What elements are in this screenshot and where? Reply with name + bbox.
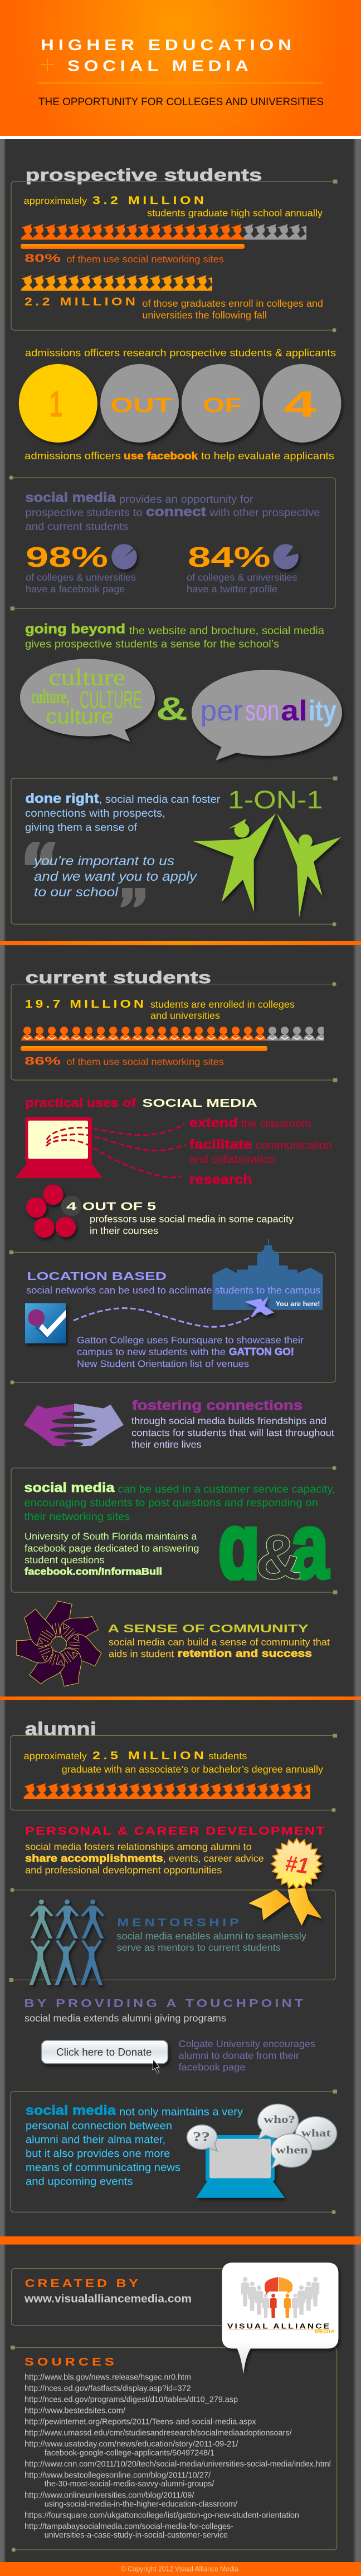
heading: practical uses — [26, 1096, 257, 1110]
text: going beyond: the website and brochure, social media — [129, 625, 324, 637]
text: personal and career development: , events, career advice — [163, 1853, 264, 1864]
bubble: what: what — [301, 2128, 331, 2139]
website: www.visualalliancemedia.com — [24, 2293, 192, 2305]
stat: 19.7 million: students are enrolled in colleges — [150, 999, 295, 1010]
icon: cursor — [153, 2059, 159, 2073]
chart: one out of four circles: OUT — [110, 394, 172, 416]
speech bubble: personality: per — [201, 695, 243, 727]
intro text: can be used in a customer service capacity, — [118, 1483, 335, 1495]
text: colgate university: alumni to donate from their — [179, 2050, 299, 2061]
heading: current students: current students — [26, 968, 211, 987]
speech bubble: culture: culture — [49, 665, 125, 691]
quote text: and we want you to apply — [34, 869, 197, 884]
heading: created by: CREATED BY — [25, 2277, 138, 2289]
intro text — [25, 791, 221, 833]
panel: done right — [11, 777, 341, 926]
heading: practical uses: SOCIAL MEDIA — [142, 1097, 257, 1110]
text: colgate university: facebook page — [179, 2062, 246, 2073]
bar: 80 percent — [21, 244, 245, 249]
intro text: , social media can foster — [99, 793, 221, 806]
icon: foursquare — [25, 1303, 66, 1343]
panel: alumni stats — [11, 1734, 337, 1812]
text: providing a touchpoint: BY PROVIDING A TOUCHPOINT — [24, 1997, 303, 2009]
body text: but it also provides one more — [26, 2147, 170, 2160]
text: admissions officers use facebook: to help evaluate applicants — [201, 450, 334, 462]
intro text: done right — [26, 791, 99, 806]
source list: universities-a-case-study-in-social-customer-service — [45, 2531, 228, 2540]
text: providing a touchpoint — [24, 1997, 303, 2024]
icon: two figures high five — [193, 813, 341, 917]
text: acclimate: social networks can be used to acclimate students to the campus — [26, 1285, 321, 1296]
logo: visual alliance media speech bubble — [222, 2263, 339, 2374]
text: university of south florida: facebook.com/InformaBull — [25, 1566, 162, 1577]
icon: community hands flower — [13, 1601, 104, 1690]
icon: closing quote — [120, 888, 145, 907]
text: going beyond: going beyond — [25, 622, 125, 637]
label: you are here: You are here! — [276, 1300, 320, 1308]
intro text: connections with prospects, — [25, 807, 165, 820]
text: admissions officers use facebook: admissions officers — [25, 450, 121, 462]
stat: 2.2 million: universities the following fall — [142, 310, 267, 321]
icon: campus building — [213, 1239, 323, 1310]
stat: 84 percent twitter: of colleges & universities — [187, 572, 297, 583]
heading: location based: LOCATION BASED — [27, 1270, 167, 1283]
logo wordmark: VISUAL ALLIANCE — [227, 2323, 329, 2330]
text: personal and career development: and professional development opportunities — [25, 1864, 222, 1876]
logo media label: MEDIA — [315, 2329, 335, 2334]
icon: opening quote — [25, 842, 56, 865]
stat: 4 out of 5: in their courses — [90, 1225, 158, 1237]
stat: 2.2 million — [25, 296, 323, 321]
source list: http://nces.ed.gov/programs/digest/d10/tables/dt10_279.asp — [25, 2396, 238, 2405]
panel: social media opportunity — [9, 475, 335, 610]
graphic: q and a: a — [291, 1495, 329, 1598]
quote text: you’re important to us — [33, 853, 174, 868]
bubble: when: when — [276, 2145, 309, 2156]
stat: 84 percent twitter — [187, 541, 299, 595]
text: going beyond: gives prospective students a sense for the school’s — [25, 638, 279, 650]
intro text: connect — [146, 504, 206, 519]
stat: 98 percent facebook: have a facebook page — [26, 583, 125, 595]
source list: facebook-google-college-applicants/50497248/1 — [45, 2449, 214, 2457]
stat: 80 percent: 80% — [25, 253, 61, 265]
text: admissions officers research: admissions officers research prospective students & applicants — [25, 347, 336, 359]
icon: map marker x — [245, 1297, 274, 1317]
speech bubble: culture: CULTURE — [80, 686, 142, 714]
text: fostering connections: fostering connections — [132, 1398, 303, 1414]
text: gatton college: campus to new students with the — [77, 1346, 226, 1357]
list: practical uses: the classroom — [241, 1118, 311, 1130]
button: click here to donate — [41, 2040, 168, 2064]
intro text: encouraging students to post questions and responding on — [24, 1497, 318, 1509]
stat: 2.2 million: of those graduates enroll in colleges and — [142, 298, 323, 309]
header rule — [38, 82, 323, 84]
list: practical uses: research — [189, 1172, 252, 1188]
stat: 4 out of 5: 4 — [66, 1200, 77, 1213]
icon: blue laptop — [196, 2135, 285, 2198]
stat: 84 percent twitter: have a twitter profile — [187, 583, 277, 595]
chart: four of five circles — [26, 1185, 81, 1238]
intro text: social media — [26, 490, 116, 506]
stat: 3.2 million: 3.2 MILLION — [92, 194, 204, 207]
text: mentors — [117, 1931, 306, 1953]
source list: the-30-most-social-media-savvy-alumni-groups/ — [45, 2480, 214, 2489]
text: gatton college: Gatton College uses Foursquare to showcase their — [77, 1334, 304, 1346]
stat: 19.7 million — [25, 998, 295, 1021]
graphic: q and a — [219, 1525, 331, 1581]
text: fostering connections: contacts for students that will last throughout — [131, 1427, 334, 1438]
source list: http://pewinternet.org/Reports/2011/Teens-and-social-media.aspx — [25, 2418, 256, 2427]
body text: and upcoming events — [26, 2175, 133, 2187]
copyright: © Copyright 2012 Visual Alliance Media — [121, 2565, 239, 2573]
text: personal and career development: PERSONAL & CAREER DEVELOPMENT — [25, 1825, 325, 1837]
text: university of south florida: student questions — [25, 1554, 105, 1566]
body text — [26, 2103, 243, 2187]
panel: enrolment stats — [11, 982, 338, 1082]
body text: not only maintains a very — [119, 2106, 243, 2118]
stat: 2.5 million: 2.5 MILLION — [92, 1749, 204, 1762]
list: practical uses: and collaboration — [189, 1154, 275, 1166]
heading: mentorship: MENTORSHIP — [117, 1916, 239, 1929]
bubble: who — [258, 2104, 298, 2140]
stat: 4 out of 5 — [66, 1200, 294, 1237]
stat: 4 out of 5: professors use social media in some capacity — [90, 1214, 294, 1225]
pictogram: enrolling graduates row — [21, 275, 212, 291]
intro text: prospective students to — [26, 507, 143, 519]
heading: prospective students: prospective students — [26, 165, 262, 185]
intro text: social media — [24, 1480, 115, 1495]
text: gatton college — [77, 1334, 304, 1369]
panel: mentorship — [9, 1888, 335, 1985]
stat: 86 percent — [25, 1055, 224, 1067]
text: personal and career development — [25, 1825, 325, 1876]
text: university of south florida — [25, 1531, 199, 1577]
stat: 98 percent facebook: of colleges & universities — [26, 572, 136, 583]
stat: 3.2 million: students graduate high school annually — [147, 207, 323, 218]
text: going beyond — [25, 622, 324, 650]
text: gatton college: New Student Orientation list of venues — [77, 1358, 249, 1369]
intro text — [26, 490, 320, 533]
source list: http://www.usatoday.com/news/education/story/2011-09-21/ — [25, 2440, 238, 2449]
text: personal and career development: share accomplishments — [25, 1853, 163, 1864]
source list: using-social-media-in-the-higher-education-classroom/ — [45, 2500, 238, 2509]
body text: alumni and their alma mater, — [26, 2133, 165, 2146]
icon: red and orange chat bubbles — [265, 2277, 292, 2295]
heading: practical uses: practical uses of — [26, 1096, 136, 1110]
pictogram: graduates row — [21, 224, 306, 240]
source list: http://www.bls.gov/news.release/hsgec.nr0.htm — [25, 2373, 191, 2382]
text: sense of community: aids in student — [109, 1648, 174, 1659]
source list: http://tampabaysocialmedia.com/social-media-for-colleges- — [25, 2522, 233, 2531]
plus sign — [41, 58, 54, 71]
title line two: SOCIAL MEDIA — [67, 58, 248, 75]
quote text: to our school — [34, 885, 119, 899]
speech bubbles: who what when — [187, 2104, 336, 2168]
stat: 98 percent facebook: 98% — [26, 541, 108, 573]
panel: created by — [12, 2269, 223, 2325]
source list: http://www.bestedsites.com/ — [25, 2406, 126, 2415]
speech bubble: personality: al — [281, 695, 308, 727]
text: fostering connections: their entire lives — [131, 1439, 202, 1450]
text: sense of community: retention and success — [178, 1648, 312, 1659]
icon: #1 award ribbon: #1 — [284, 1851, 310, 1879]
icon: red and orange people — [270, 2294, 291, 2318]
icon: red laptop — [16, 1117, 103, 1178]
text: colgate university: Colgate University encourages — [179, 2038, 315, 2049]
intro text: giving them a sense of — [25, 821, 138, 833]
stat: 80 percent — [25, 253, 224, 265]
subtitle: THE OPPORTUNITY FOR COLLEGES AND UNIVERSITIES — [38, 96, 324, 108]
source list: http://www.umassd.edu/cmr/studiesandresearch/socialmediaadoptionsoars/ — [25, 2429, 292, 2438]
body text: means of communicating news — [26, 2161, 180, 2173]
text: mentors: social media enables alumni to seamlessly — [117, 1931, 306, 1942]
list: practical uses: extend — [189, 1116, 237, 1130]
speech bubble: personality — [192, 670, 342, 760]
stat: 80 percent: of them use social networking sites — [66, 254, 224, 265]
bubble: what — [295, 2117, 336, 2150]
stat: 3.2 million: approximately — [24, 195, 87, 207]
stat: 2.5 million: students — [208, 1750, 247, 1762]
text: sense of community — [108, 1623, 330, 1659]
chart: one out of four circles — [19, 364, 342, 443]
speech bubble: personality: ity — [309, 695, 336, 727]
text: colgate university — [179, 2038, 315, 2073]
graphic: q and a: q — [218, 1495, 260, 1598]
icon: mentor figures — [29, 1900, 105, 1985]
chart: one out of four circles: OF — [203, 394, 242, 416]
bubble: question marks: ?? — [193, 2130, 210, 2145]
chart: one out of four circles: 1 — [50, 383, 62, 424]
dashed connector lines — [46, 1123, 186, 1177]
panel: graduation stats — [11, 180, 338, 332]
pictogram: alumni row — [24, 1783, 310, 1799]
stat: 86 percent: 86% — [25, 1055, 61, 1067]
source list: http://www.cnn.com/2011/10/20/tech/social-media/universities-social-media/index.html — [25, 2460, 331, 2469]
bar: 86 percent — [21, 1046, 267, 1051]
bubble: when — [271, 2134, 311, 2168]
stat: 4 out of 5: OUT OF 5 — [82, 1200, 156, 1213]
logo underline — [227, 2329, 329, 2330]
speech bubble: culture: culture — [46, 705, 114, 728]
panel: customer service — [11, 1466, 338, 1598]
divider: orange strip — [0, 2236, 361, 2245]
divider: orange strip — [0, 941, 361, 945]
intro text — [24, 1480, 335, 1523]
stat: 19.7 million: 19.7 MILLION — [25, 998, 144, 1010]
panel: personal connection — [11, 2089, 337, 2214]
left side strip — [0, 139, 6, 2562]
list: practical uses: communication — [256, 1140, 332, 1152]
source list: https://foursquare.com/ukgattoncollege/list/gatton-go-new-student-orientation — [25, 2511, 299, 2520]
body text: social media — [26, 2103, 116, 2118]
stat: 86 percent: of them use social networking sites — [66, 1056, 224, 1067]
bubble: question marks — [187, 2125, 217, 2151]
stat: 2.5 million — [24, 1749, 323, 1775]
stat: 98 percent facebook — [26, 541, 137, 595]
pictogram: students row — [21, 1027, 324, 1041]
icon: grey crowd — [241, 2277, 319, 2318]
intro text: their networking sites — [24, 1511, 130, 1523]
button: click here to donate: Click here to Donate — [56, 2047, 152, 2059]
icon: clasped hands — [24, 1404, 124, 1446]
panel: location based — [9, 1239, 335, 1385]
stat: 2.2 million: 2.2 MILLION — [25, 296, 135, 308]
chart: one out of four circles: 4 — [284, 383, 316, 424]
heading: alumni: alumni — [25, 1719, 96, 1739]
speech bubble: culture — [20, 659, 155, 742]
text: personal and career development: social media fosters relationships among alumni to — [25, 1841, 252, 1852]
heading: 1-on-1: 1-ON-1 — [228, 786, 323, 814]
list: practical uses — [189, 1116, 332, 1188]
text: fostering connections — [131, 1398, 334, 1450]
intro text: provides an opportunity for — [119, 493, 253, 506]
header banner — [0, 0, 361, 139]
body text: personal connection between — [26, 2120, 172, 2132]
title line one: HIGHER EDUCATION — [41, 37, 291, 53]
text: admissions officers use facebook — [25, 450, 334, 462]
divider: orange strip — [0, 1696, 361, 1700]
panel: sources — [11, 2346, 337, 2552]
speech bubble: culture: culture, — [31, 685, 69, 708]
icon: #1 award ribbon — [248, 1838, 323, 1926]
footer bar — [0, 2562, 361, 2576]
text: fostering connections: through social media builds friendships and — [131, 1415, 326, 1426]
stat: 2.5 million: approximately — [24, 1750, 87, 1762]
speech bubble: personality: son — [245, 695, 279, 727]
stat: 3.2 million — [24, 194, 323, 218]
text: gatton college: GATTON GO! — [229, 1346, 294, 1357]
intro text: with other prospective — [209, 507, 320, 519]
source list: http://www.bestcollegesonline.com/blog/2011/10/27/ — [25, 2471, 211, 2480]
source list — [25, 2373, 331, 2540]
text: university of south florida: facebook page dedicated to answering — [25, 1543, 199, 1554]
text: providing a touchpoint: social media extends alumni giving programs — [25, 2013, 226, 2024]
stat: 19.7 million: and universities — [150, 1010, 220, 1021]
quote text — [33, 853, 197, 899]
text: sense of community: social media can build a sense of community that — [109, 1637, 330, 1648]
graphic: q and a: & — [255, 1522, 302, 1593]
ampersand: & — [156, 691, 188, 727]
list: practical uses: facilitate — [189, 1137, 252, 1152]
text: mentors: serve as mentors to current students — [117, 1942, 281, 1953]
bubble: who: who? — [264, 2114, 295, 2126]
text: university of south florida: University of South Florida maintains a — [25, 1531, 197, 1542]
intro text: and current students — [26, 521, 128, 533]
stat: 84 percent twitter: 84% — [188, 541, 271, 573]
stat: 2.5 million: graduate with an associate’s or bachelor’s degree annually — [62, 1764, 323, 1775]
text: sense of community: A SENSE OF COMMUNITY — [108, 1623, 309, 1635]
dashed route line — [74, 1308, 260, 1327]
source list: http://nces.ed.gov/fastfacts/display.asp?id=372 — [25, 2384, 191, 2393]
heading: sources: SOURCES — [25, 2356, 114, 2368]
source list: http://www.onlineuniversities.com/blog/2011/09/ — [25, 2491, 194, 2500]
text: admissions officers use facebook: use facebook — [124, 450, 198, 462]
right side strip — [353, 139, 361, 2562]
